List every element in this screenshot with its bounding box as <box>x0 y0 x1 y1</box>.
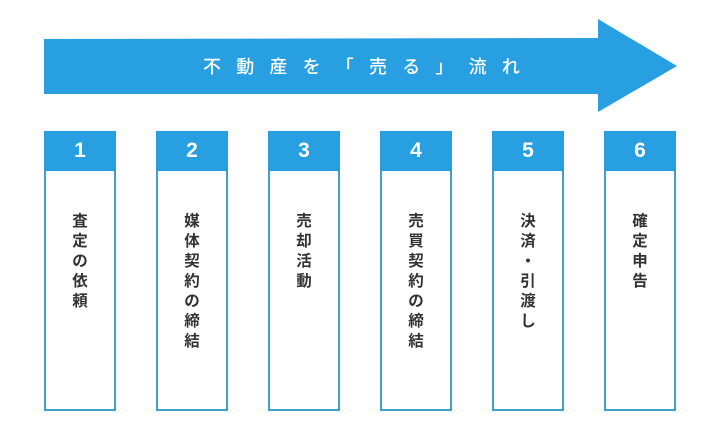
step 3 label: 動 <box>296 273 312 290</box>
step 5 <box>492 131 564 411</box>
step 2 label: 契 <box>184 253 200 270</box>
step 4 label: 約 <box>408 273 424 290</box>
step 2 <box>156 131 228 411</box>
step 6 label <box>632 212 648 290</box>
step 3 label: 活 <box>296 253 312 270</box>
step 5 label: 決 <box>520 213 536 230</box>
step 1 label: 頼 <box>72 293 88 310</box>
step 4 label: 締 <box>408 313 424 330</box>
step 4 number <box>380 131 452 171</box>
step 1 number: 1 <box>74 139 86 162</box>
step 1 number <box>44 131 116 171</box>
step 3 label: 売 <box>296 213 312 230</box>
step 1 label: の <box>72 253 88 270</box>
step 4 label: 売 <box>408 213 424 230</box>
step 6 label: 確 <box>632 213 648 230</box>
step 3 label <box>296 212 312 290</box>
step 2 label: 体 <box>184 233 200 250</box>
step 2 label: の <box>184 293 200 310</box>
step 3 <box>268 131 340 411</box>
step 5 label: 渡 <box>520 293 536 310</box>
step 6 label: 定 <box>632 233 648 250</box>
step 4 label: の <box>408 293 424 310</box>
step 1 label: 定 <box>72 233 88 250</box>
step 6 number <box>604 131 676 171</box>
step 3 number <box>268 131 340 171</box>
step 2 number: 2 <box>186 139 198 162</box>
step 5 label: 引 <box>520 273 536 290</box>
step 2 number <box>156 131 228 171</box>
step 6 <box>604 131 676 411</box>
step 2 label: 結 <box>184 333 200 350</box>
arrow banner: 不動産を「売る」流れ <box>203 57 535 77</box>
step 3 number: 3 <box>298 139 310 162</box>
step 5 label: 済 <box>520 233 536 250</box>
step 4 label: 契 <box>408 253 424 270</box>
step 5 number <box>492 131 564 171</box>
step 4 label: 結 <box>408 333 424 350</box>
step 3 label: 却 <box>296 233 312 250</box>
step 2 label: 媒 <box>184 213 200 230</box>
step 2 label: 締 <box>184 313 200 330</box>
step 1 label: 査 <box>72 213 88 230</box>
step 5 label: し <box>520 313 536 330</box>
step 6 label: 申 <box>632 253 648 270</box>
step 5 label <box>520 212 536 330</box>
step 1 label <box>72 212 88 310</box>
step 2 label <box>184 212 200 350</box>
step 6 number: 6 <box>634 139 646 162</box>
step 1 label: 依 <box>72 273 88 290</box>
step 5 label: ・ <box>520 253 536 270</box>
step 6 label: 告 <box>632 273 648 290</box>
step 4 label: 買 <box>408 233 424 250</box>
step 4 <box>380 131 452 411</box>
step 2 label: 約 <box>184 273 200 290</box>
step 4 label <box>408 212 424 350</box>
step 4 number: 4 <box>410 139 422 162</box>
arrow banner <box>44 19 677 112</box>
step 5 number: 5 <box>522 139 534 162</box>
step 1 <box>44 131 116 411</box>
